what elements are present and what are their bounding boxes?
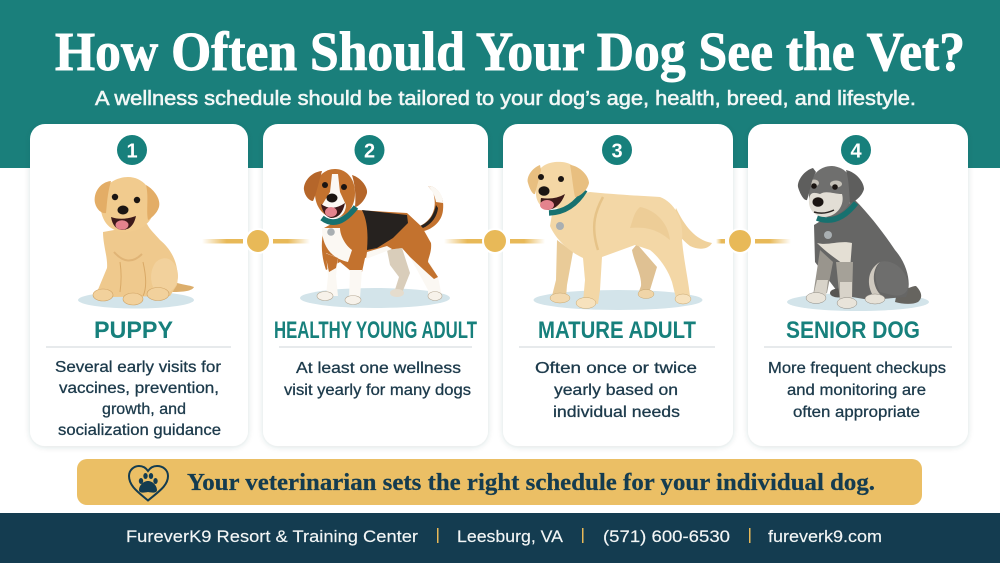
icon: senior dog illustration [787, 166, 929, 311]
footer: phone: (571) 600-6530 [603, 527, 730, 546]
description: vaccines, prevention, [59, 380, 219, 397]
number badge 4 [841, 135, 871, 165]
footer: business name: FureverK9 Resort & Training Center [126, 527, 418, 546]
description: often appropriate [793, 404, 920, 421]
description: socialization guidance [58, 422, 221, 439]
description: More frequent checkups [768, 360, 946, 377]
icon: puppy illustration [78, 177, 194, 308]
divider [519, 346, 715, 348]
number badge 3 [602, 135, 632, 165]
footer: separator [582, 528, 584, 543]
heading: PUPPY [94, 317, 173, 344]
icon: heart with paw [129, 466, 168, 500]
description: At least one wellness [296, 360, 461, 377]
number badge 1: 1 [126, 140, 138, 162]
panel: mature adult [503, 124, 733, 446]
footer: separator [749, 528, 750, 543]
panel: healthy young adult [263, 124, 488, 446]
title: How Often Should Your Dog See the Vet? [55, 21, 965, 82]
icon: labrador illustration [528, 162, 712, 310]
callout banner [77, 459, 922, 505]
description: individual needs [553, 404, 680, 421]
icon: beagle illustration [300, 169, 450, 308]
description: and monitoring are [787, 382, 926, 399]
connector 2 [444, 229, 545, 253]
description: visit yearly for many dogs [284, 382, 471, 399]
number badge 2: 2 [364, 140, 375, 162]
description: yearly based on [554, 382, 678, 399]
description: growth, and [102, 401, 186, 418]
connector 1 [202, 229, 310, 253]
connector 3 [716, 229, 791, 253]
subtitle: A wellness schedule should be tailored to your dog’s age, health, breed, and lifestyle. [95, 88, 916, 110]
footer: website: fureverk9.com [768, 527, 882, 546]
heading: MATURE ADULT [538, 317, 696, 344]
panel: puppy [30, 124, 248, 446]
description: Several early visits for [55, 359, 222, 376]
description [55, 359, 222, 439]
footer [0, 513, 1000, 563]
number badge 1 [117, 135, 147, 165]
heading: HEALTHY YOUNG ADULT [274, 317, 477, 344]
description [768, 360, 946, 421]
divider [279, 346, 472, 348]
header band [0, 0, 1000, 168]
number badge 3: 3 [611, 140, 623, 162]
description: Often once or twice [535, 360, 697, 377]
callout text: Your veterinarian sets the right schedule for your individual dog. [187, 470, 875, 496]
number badge 2 [354, 135, 384, 165]
footer: separator [437, 528, 438, 543]
divider [46, 346, 231, 348]
number badge 4: 4 [850, 140, 862, 162]
panel: senior dog [748, 124, 968, 446]
footer: location: Leesburg, VA [457, 527, 564, 546]
heading: SENIOR DOG [786, 317, 920, 344]
description [535, 360, 697, 421]
description [284, 360, 471, 399]
divider [764, 346, 952, 348]
